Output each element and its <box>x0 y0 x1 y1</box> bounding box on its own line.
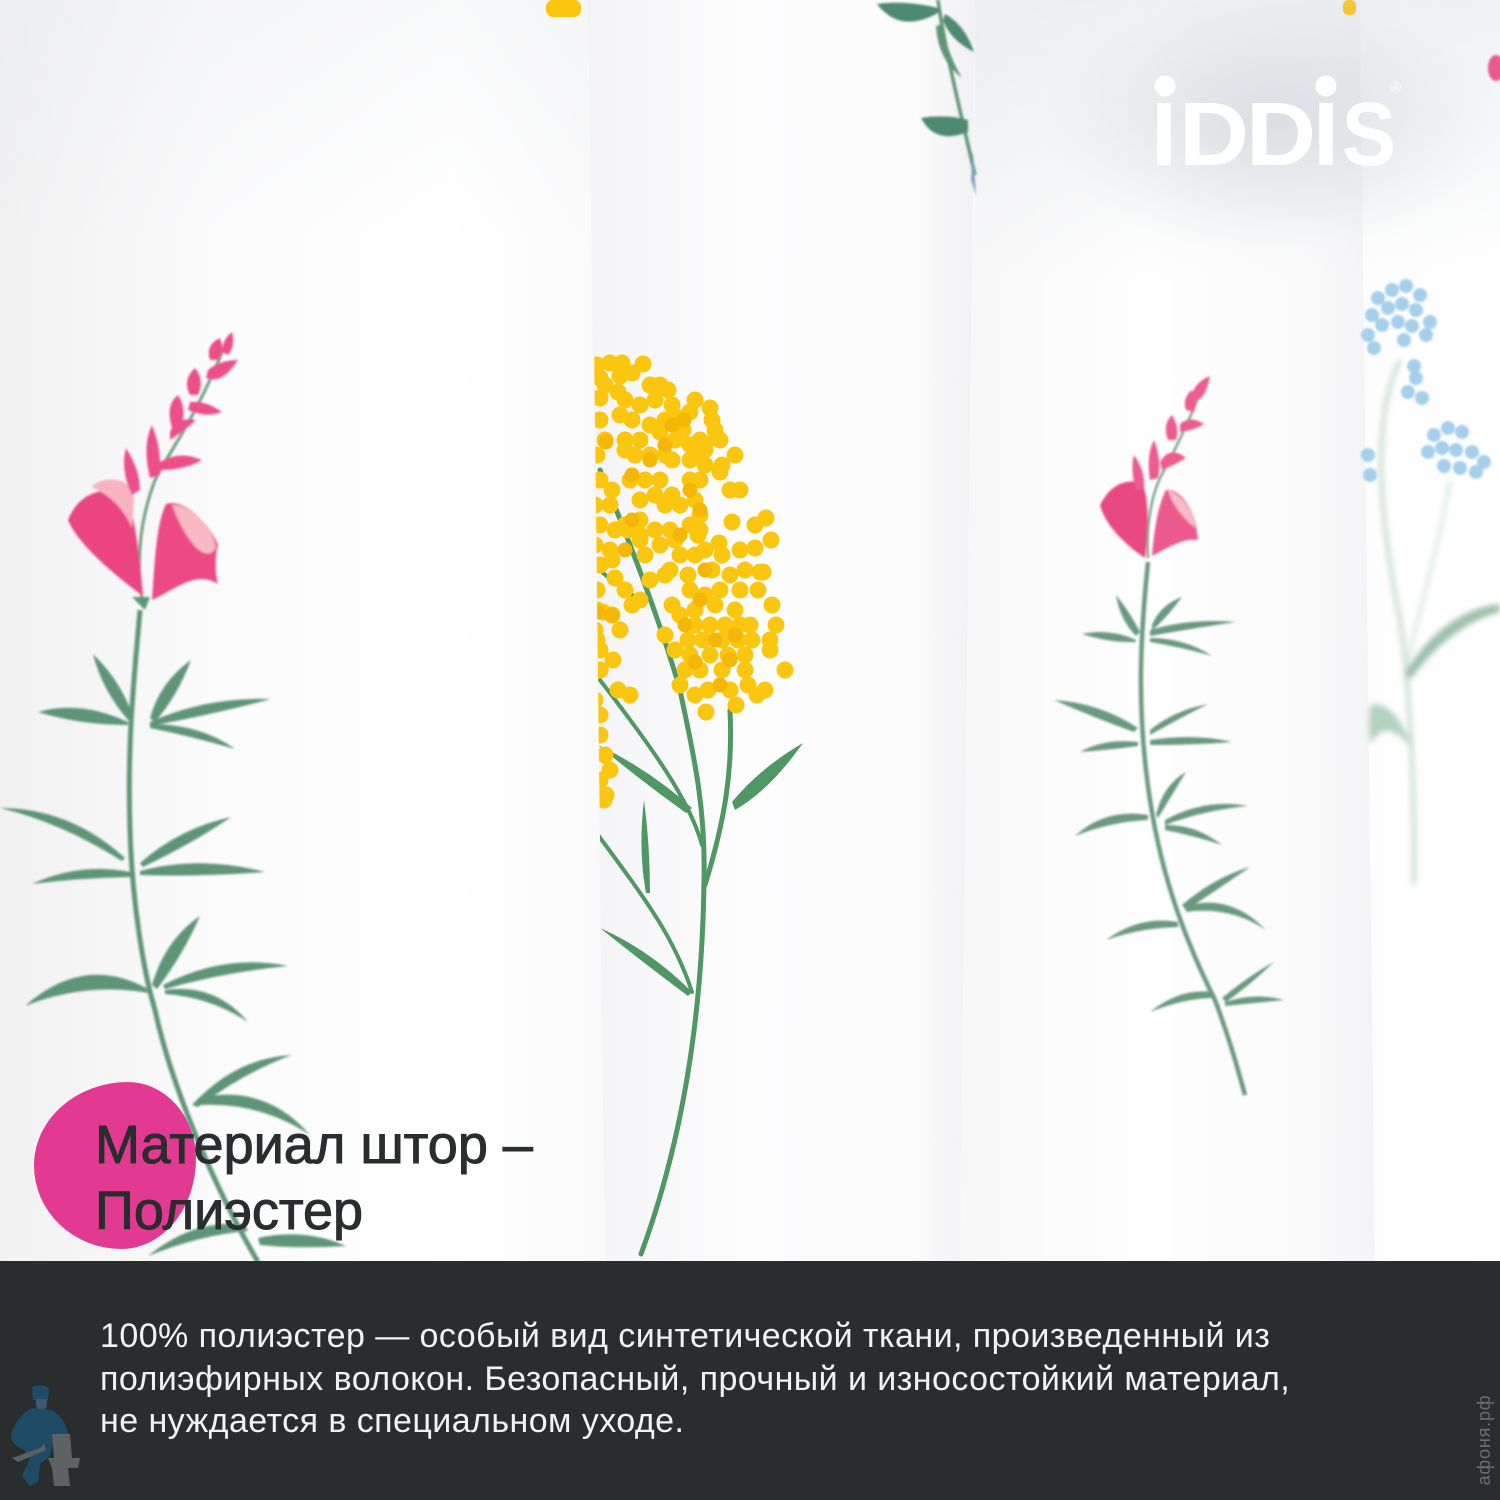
plant: top fragment stem <box>877 0 976 195</box>
logo: IDDIS <box>1151 76 1401 185</box>
title <box>95 1115 534 1241</box>
title: Материал штор – <box>95 1115 533 1175</box>
body text: полиэфирных волокон. Безопасный, прочный и износостойкий материал, <box>100 1360 1290 1398</box>
logo: IDDIS: D <box>1179 85 1249 185</box>
title: Полиэстер <box>95 1181 363 1241</box>
icon: plumber with toilet <box>11 1385 80 1486</box>
logo: IDDIS: I <box>1313 85 1339 185</box>
logo: IDDIS: ® <box>1390 79 1401 96</box>
dark text band <box>0 1261 1500 1500</box>
logo: IDDIS: I <box>1151 85 1177 185</box>
print fragments: top yellow and pink <box>546 0 1500 81</box>
body text: 100% полиэстер — особый вид синтетической ткани, произведенный из <box>100 1317 1270 1355</box>
logo: IDDIS: D <box>1246 85 1316 185</box>
side watermark: афоня.рф <box>1474 1395 1494 1485</box>
body text: не нуждается в специальном уходе. <box>100 1402 684 1440</box>
plant: pink flower right <box>1054 376 1284 1095</box>
pink blob behind title <box>34 1082 196 1249</box>
plant: pink flower left <box>0 332 346 1262</box>
plant: yellow mimosa centre <box>595 363 803 1254</box>
body text <box>100 1317 1290 1440</box>
plant: blurred blue flower far right <box>1368 286 1500 885</box>
logo: IDDIS: S <box>1342 85 1396 185</box>
